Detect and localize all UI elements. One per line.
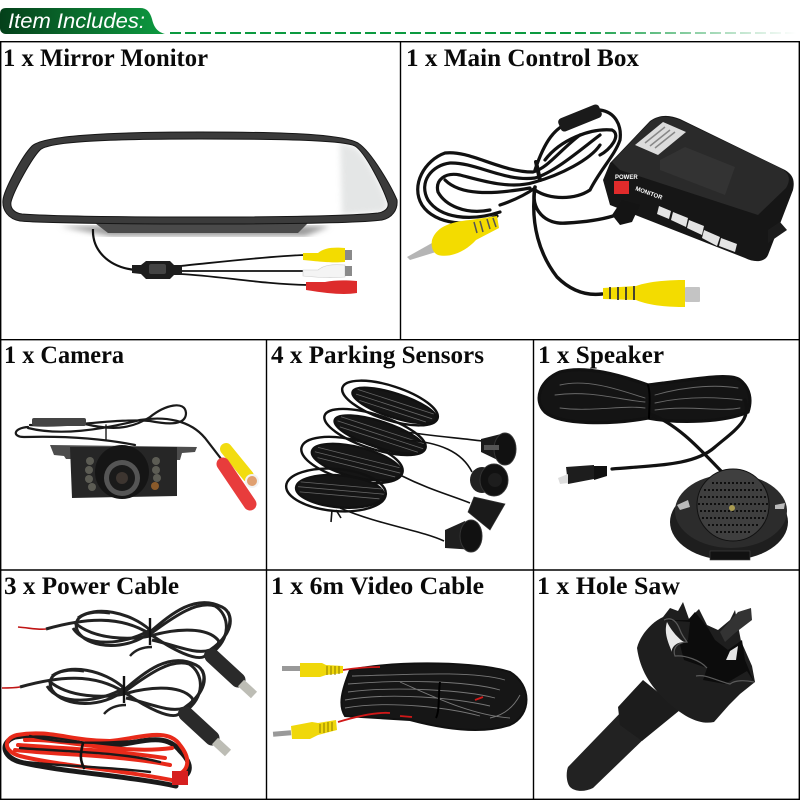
- hole saw cup: [637, 602, 755, 723]
- barcode label: [635, 122, 686, 155]
- heading: main control box: 1 x Main Control Box: [406, 45, 639, 72]
- video cable red wires: [338, 667, 483, 722]
- RCA white: [303, 265, 352, 278]
- sensor 3: [468, 497, 505, 530]
- yellow RCA socket: [603, 280, 700, 307]
- video RCA plug 2: [273, 720, 337, 739]
- control box body: [603, 116, 794, 261]
- sensor 1: [481, 433, 516, 465]
- panel: main control box: [406, 45, 794, 307]
- sensor cables: [331, 431, 482, 541]
- video RCA plug 1: [282, 663, 343, 677]
- panel: video cable: [271, 573, 526, 739]
- heading: parking sensors: 4 x Parking Sensors: [271, 342, 484, 369]
- header banner: Item Includes: Item Includes:: [8, 9, 145, 33]
- monitor cable and connector: [93, 229, 308, 285]
- power socket: [614, 175, 638, 194]
- panel: parking sensors: [271, 342, 516, 552]
- heading: speaker: 1 x Speaker: [538, 342, 664, 369]
- lens: [104, 460, 140, 496]
- power socket: POWER: [615, 175, 638, 181]
- panel: power cables: [2, 573, 254, 786]
- IR LEDs: [85, 457, 161, 491]
- speaker puck: [670, 469, 788, 560]
- sensor ports: [657, 206, 737, 252]
- hole saw collar: [618, 680, 680, 741]
- speaker grille: [697, 469, 769, 541]
- heading: hole saw: 1 x Hole Saw: [537, 573, 680, 600]
- monitor plug: [612, 200, 640, 225]
- sensor cable coils: [284, 371, 443, 515]
- red JST connector: [172, 771, 188, 785]
- mirror glare: [340, 142, 388, 215]
- RCA yellow: [303, 248, 352, 262]
- header banner: Item Includes: [0, 8, 796, 34]
- heading: video cable: 1 x 6m Video Cable: [271, 573, 484, 600]
- camera cables: [16, 405, 222, 460]
- pilot drill: [720, 608, 752, 642]
- speaker USB plug: [558, 465, 607, 484]
- red power cable: [5, 733, 189, 786]
- sensor 4: [445, 520, 482, 552]
- sensor 2: [470, 464, 508, 496]
- mirror shadow: [60, 223, 330, 236]
- panel: hole saw: [537, 573, 755, 791]
- hole saw interior: [663, 612, 754, 684]
- monitor port label: MONITOR: [634, 186, 664, 202]
- video cable coil: [341, 663, 526, 730]
- heading: camera: 1 x Camera: [4, 342, 124, 369]
- camera yellow RCA: [226, 449, 258, 487]
- mirror frame: [3, 132, 397, 224]
- hole saw tooth highlights: [664, 619, 754, 684]
- power cable 1: [18, 603, 254, 695]
- white gaps between teeth: [666, 622, 738, 660]
- control box cables: [418, 110, 620, 294]
- panel: camera: [4, 342, 258, 504]
- ferrite bead: [557, 103, 603, 133]
- heading: mirror monitor: 1 x Mirror Monitor: [3, 45, 208, 72]
- mounting tab: [768, 222, 787, 243]
- speaker cable coil: [539, 370, 750, 472]
- panel: speaker: [538, 342, 788, 560]
- RCA red: [306, 280, 357, 294]
- yellow RCA plug: [407, 216, 499, 260]
- camera red connector: [223, 464, 250, 504]
- power cable 2: [2, 661, 228, 753]
- panel: mirror monitor: [3, 45, 397, 294]
- heading: power cable: 3 x Power Cable: [4, 573, 179, 600]
- hole saw shaft: [567, 708, 650, 791]
- camera body: [50, 445, 197, 499]
